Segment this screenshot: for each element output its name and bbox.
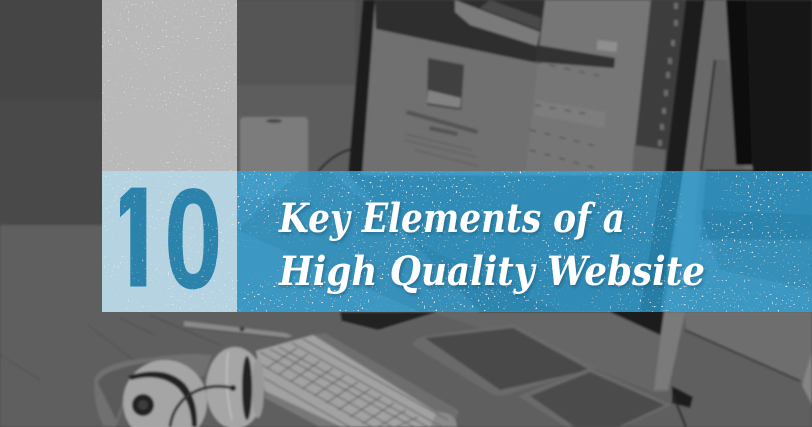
- keyboard: [256, 333, 458, 427]
- grey top panel with speckles: [102, 0, 237, 171]
- monitor screen: [362, 0, 686, 175]
- cable clip behind stand: [672, 386, 693, 408]
- title line 1: Key Elements of a: [278, 195, 625, 242]
- pen: [184, 321, 293, 338]
- monitor bezel: [348, 0, 705, 340]
- router on desk: [239, 116, 352, 171]
- dark room at right of monitor: [700, 0, 812, 240]
- monitor lower body: [610, 312, 662, 340]
- light blue number panel: [102, 171, 237, 312]
- blue title band: [237, 171, 812, 312]
- monitor back and right side: [682, 0, 754, 171]
- number 10: 0: [164, 158, 222, 319]
- number 10: 1: [103, 152, 168, 343]
- monitor stand foot: [412, 324, 672, 427]
- title line 2: High Quality Website: [278, 248, 705, 295]
- right desk object: [685, 312, 812, 385]
- number 10: [120, 188, 218, 290]
- headphones: [94, 347, 264, 427]
- title: [278, 195, 705, 295]
- paper lines on desk: [0, 315, 220, 380]
- phone: [340, 312, 440, 331]
